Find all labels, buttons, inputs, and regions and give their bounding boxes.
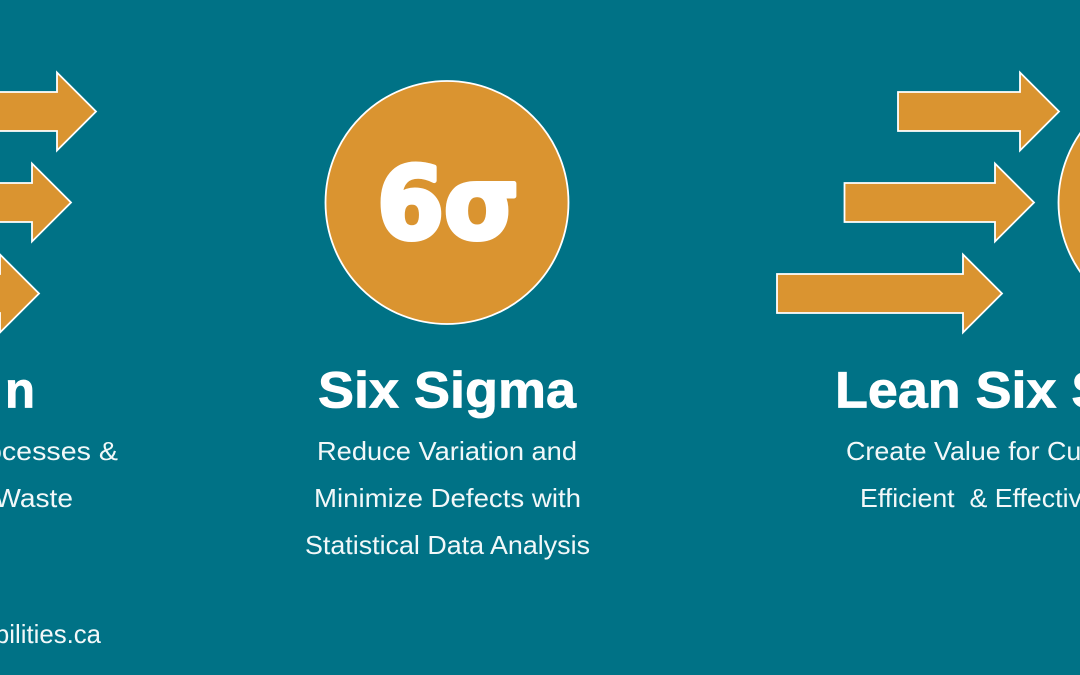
icon: six sigma circle bbox=[326, 81, 568, 324]
text: six sigma description line 2: Minimize Defects with bbox=[314, 483, 581, 513]
text: six sigma description line 1: Reduce Variation and bbox=[317, 436, 577, 466]
heading: six sigma: Six Sigma bbox=[318, 362, 577, 418]
panel: lean bbox=[0, 72, 118, 513]
icon: six sigma symbol: 6σ bbox=[377, 145, 519, 262]
text: six sigma description line 3: Statistical Data Analysis bbox=[305, 530, 590, 560]
icon: lean arrow middle bbox=[0, 164, 71, 242]
icon: lean six sigma arrow top bbox=[898, 72, 1059, 150]
icon: lean six sigma arrow bottom bbox=[777, 254, 1002, 332]
icon: lean six sigma circle bbox=[1058, 81, 1080, 324]
panel: lean six sigma bbox=[777, 72, 1080, 513]
icon: lean arrow top bbox=[0, 72, 96, 150]
panel: six sigma bbox=[305, 81, 590, 560]
heading: lean: n bbox=[5, 362, 35, 418]
icon: lean arrow bottom bbox=[0, 254, 39, 332]
icon: lean six sigma arrow middle bbox=[844, 164, 1034, 242]
